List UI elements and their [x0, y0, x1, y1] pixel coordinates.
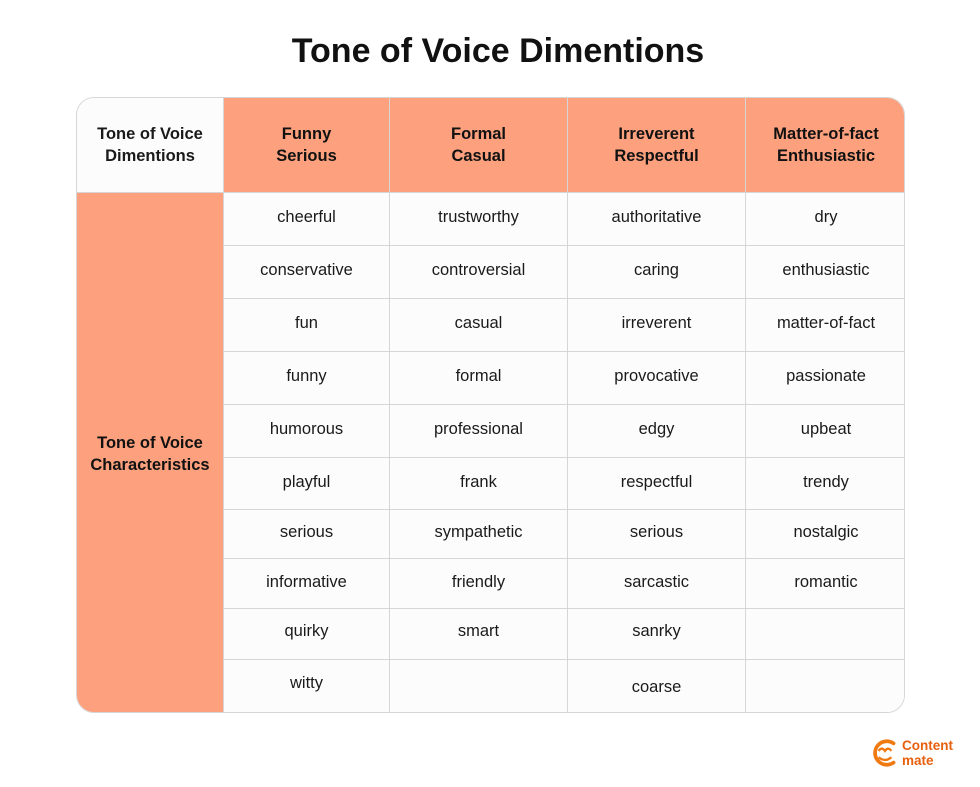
row header: characteristics — [77, 193, 224, 714]
table — [76, 97, 905, 713]
table: playful — [283, 472, 330, 490]
table: controversial — [432, 261, 525, 279]
table: friendly — [452, 572, 505, 590]
table: passionate — [786, 367, 866, 385]
table: sarcastic — [624, 572, 689, 590]
table: caring — [634, 261, 679, 279]
table: edgy — [639, 420, 674, 438]
table: serious — [280, 523, 333, 541]
header: Irreverent Respectful — [568, 98, 746, 193]
row header: characteristics: Characteristics — [90, 456, 210, 474]
table: fun — [295, 314, 318, 332]
header: Irreverent Respectful: Respectful — [614, 147, 699, 165]
header: Irreverent Respectful: Irreverent — [618, 125, 695, 143]
logo text — [902, 738, 953, 768]
table: serious — [630, 523, 683, 541]
cells: cheerful — [277, 208, 336, 226]
table: funny — [286, 367, 327, 385]
table: trendy — [803, 472, 849, 490]
header: Formal Casual: Casual — [451, 147, 506, 165]
table: humorous — [270, 420, 343, 438]
table: sanrky — [632, 622, 681, 640]
table: conservative — [260, 261, 353, 279]
table: trustworthy — [438, 208, 519, 226]
table: witty — [290, 674, 323, 692]
header: Funny Serious — [224, 98, 390, 193]
table: quirky — [284, 622, 328, 640]
table: upbeat — [801, 420, 851, 438]
header: Formal Casual: Formal — [451, 125, 506, 143]
header: Funny Serious: Serious — [276, 147, 337, 165]
table: respectful — [621, 472, 692, 490]
table: professional — [434, 420, 523, 438]
header: corner: Tone of Voice — [97, 125, 203, 143]
title: Tone of Voice Dimentions — [292, 32, 704, 70]
table: nostalgic — [793, 523, 859, 541]
table: casual — [455, 314, 502, 332]
header: Formal Casual — [390, 98, 568, 193]
header: Funny Serious: Funny — [282, 125, 331, 143]
header: corner — [77, 98, 224, 193]
table: dry — [815, 208, 837, 226]
table: informative — [266, 572, 347, 590]
table: romantic — [794, 572, 858, 590]
logo text: Content — [902, 738, 953, 753]
logo text: mate — [902, 753, 934, 768]
cells — [224, 193, 390, 246]
table: enthusiastic — [782, 261, 870, 279]
table: irreverent — [622, 314, 691, 332]
header: Matter-of-fact Enthusiastic — [746, 98, 906, 193]
header: corner: Dimentions — [105, 147, 195, 165]
icon: logo mark — [873, 739, 896, 767]
table: formal — [456, 367, 501, 385]
table: sympathetic — [434, 523, 523, 541]
table: authoritative — [612, 208, 701, 226]
table: smart — [458, 622, 499, 640]
table: matter-of-fact — [777, 314, 875, 332]
table: provocative — [614, 367, 699, 385]
table: frank — [460, 472, 497, 490]
table: coarse — [632, 678, 681, 696]
logo — [873, 738, 953, 768]
header: Matter-of-fact Enthusiastic: Matter-of-fact — [773, 125, 879, 143]
row header: characteristics: Tone of Voice — [97, 434, 203, 452]
header: Matter-of-fact Enthusiastic: Enthusiastic — [777, 147, 875, 165]
